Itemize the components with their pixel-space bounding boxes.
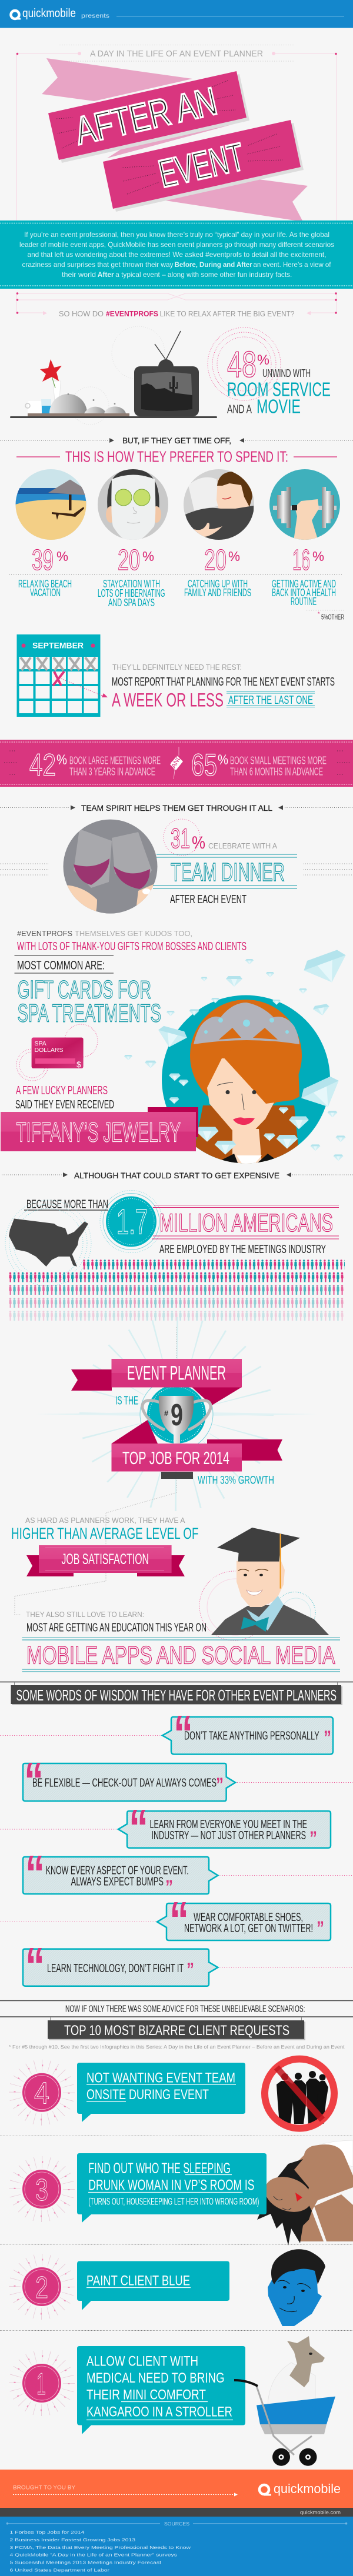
icon: flower vase	[40, 359, 62, 401]
speech bubble	[77, 2153, 267, 2223]
pictogram: rows of people	[8, 1259, 345, 1321]
speech bubble: KANGAROO IN A STROLLER	[86, 2404, 232, 2420]
text block: mobile apps: THEY ALSO STILL LOVE TO LEARN:	[26, 1611, 144, 1619]
intro text: If you’re an event professional, then you know there’s truly no “typical” day in your life. As the global	[24, 230, 329, 239]
icon: water glass	[41, 399, 51, 413]
label: AND SPA DAYS	[108, 597, 155, 609]
icon: calendar: SEPTEMBER	[32, 641, 84, 650]
stat: 48 percent: MOVIE	[257, 395, 301, 417]
footer: url strip: quickmobile.com	[300, 2510, 341, 2515]
banner: event planner: EVENT PLANNER	[127, 1362, 226, 1384]
illustration: graduate	[199, 1528, 329, 1641]
source list: 1 Forbes Top Jobs for 2014	[9, 2530, 85, 2535]
icon: cloches	[49, 394, 126, 413]
footnote: other: *	[318, 611, 320, 617]
icon: usa map	[5, 1200, 91, 1286]
panel: family and friends: %	[228, 549, 240, 564]
label: is the: IS THE	[115, 1395, 138, 1408]
speech bubble: PAINT CLIENT BLUE	[86, 2273, 190, 2288]
footnote: other	[318, 611, 344, 621]
banner: job satisfaction: JOB SATISFACTION	[61, 1551, 149, 1568]
speech bubble: ALLOW CLIENT WITH	[86, 2353, 198, 2370]
label: RELAXING BEACH	[18, 578, 72, 590]
illustration: kangaroo in stroller	[234, 2336, 335, 2466]
speech bubble: FIND OUT WHO THE SLEEPING	[88, 2160, 231, 2177]
stat 39: 39	[32, 544, 54, 576]
banner back folds	[71, 1369, 282, 1461]
icon: dumbbell	[269, 469, 340, 541]
icon: gift card	[16, 1024, 98, 1081]
footer: sources	[0, 2517, 353, 2576]
stat 16: 16	[292, 544, 310, 576]
ribbon: after an: AFTER AN	[71, 79, 221, 153]
quote: learn technology	[23, 1937, 353, 1995]
request 4	[15, 2059, 334, 2129]
arrow: calendar to text	[59, 678, 108, 697]
icon: television	[134, 331, 199, 416]
speech bubble	[77, 2063, 245, 2122]
band: booking stats: %	[56, 752, 67, 768]
and connector	[170, 747, 183, 779]
speech bubble: ONSITE DURING EVENT	[86, 2087, 209, 2103]
icon: coffee cup	[25, 401, 42, 413]
quote: know every aspect: KNOW EVERY ASPECT OF YOUR EVENT.	[46, 1864, 189, 1877]
number badge 2	[15, 2260, 69, 2314]
icon: diamonds	[124, 948, 353, 1161]
stat: 48 percent: AND A	[227, 403, 252, 416]
quote: be flexible: ”	[216, 1774, 224, 1795]
footer: brought to you by	[0, 2470, 353, 2508]
panel: staycation: %	[142, 549, 154, 564]
stat: 1.7 million americans	[5, 1190, 339, 1286]
icon: wine glasses	[62, 819, 159, 917]
panel: beach vacation: %	[56, 549, 68, 564]
text block: job satisfaction: HIGHER THAN AVERAGE LEVEL OF	[11, 1525, 199, 1542]
quote: don't take anything personally: “	[174, 1705, 193, 1763]
icon: no staff sign	[265, 2059, 334, 2129]
intro panel	[0, 220, 353, 289]
label	[184, 578, 251, 599]
badge: 1.7	[100, 1190, 162, 1252]
divider: team spirit: TEAM SPIRIT HELPS THEM GET THROUGH IT ALL	[81, 804, 272, 813]
intro text	[19, 230, 334, 279]
stat 65: 65	[191, 748, 217, 783]
icon: beach	[15, 469, 86, 541]
number badge 1	[15, 2356, 69, 2410]
icon: gift card: SPA	[34, 1040, 46, 1047]
stat: 48 percent	[208, 328, 331, 417]
text block: planning starts: THEY’LL DEFINITELY NEED THE REST:	[112, 663, 242, 671]
text block: gifts: GIFT CARDS FOR	[18, 976, 151, 1004]
speech bubble	[77, 2261, 229, 2310]
stat: team dinner	[0, 819, 353, 906]
stat: 48 percent: UNWIND WITH	[262, 367, 311, 379]
text block: planning starts: AFTER THE LAST ONE	[228, 694, 313, 707]
logo wordmark: quickmobile	[22, 7, 76, 20]
intro text: craziness and surprises that get thrown their way	[22, 260, 173, 269]
stat: 48 percent: %	[257, 352, 269, 368]
icon: calendar	[16, 634, 100, 717]
label: ROUTINE	[291, 596, 317, 607]
illustration: woman with tiara and diamonds	[124, 948, 353, 1164]
quote: don't take anything personally	[0, 1705, 333, 1763]
quote: learn technology: “	[25, 1937, 45, 1995]
icon: trophy: #	[164, 1409, 169, 1418]
request 2	[15, 2249, 325, 2326]
stat 20: 20	[118, 544, 140, 576]
speech bubble	[77, 2346, 245, 2434]
request 3	[15, 2140, 353, 2246]
footer: url strip	[0, 2508, 353, 2517]
text block: gifts: MOST COMMON ARE:	[17, 958, 105, 973]
icon: blue face	[268, 2249, 325, 2326]
source list: 5 Successful Meetings 2013 Meetings Industry Forecast	[9, 2560, 162, 2565]
stat: team dinner: TEAM DINNER	[171, 858, 285, 887]
panel: getting active	[269, 469, 340, 607]
quote: don't take anything personally: ”	[324, 1727, 331, 1748]
band: booking stats: %	[218, 752, 228, 768]
stat: 1.7 million americans: BECAUSE MORE THAN	[26, 1198, 108, 1211]
divider: expensive: ALTHOUGH THAT COULD START TO GET EXPENSIVE	[74, 1171, 279, 1180]
number badge 4: 4	[34, 2077, 49, 2111]
illustration: sleeping woman	[257, 2140, 353, 2246]
quote: learn from everyone: “	[129, 1799, 148, 1857]
quote: wear comfortable shoes: ”	[317, 1917, 324, 1939]
footer: sources: SOURCES	[164, 2521, 189, 2527]
text block: job satisfaction: AS HARD AS PLANNERS WORK, THEY HAVE A	[25, 1516, 185, 1525]
icon: trophy	[142, 1396, 211, 1479]
source list	[9, 2530, 191, 2573]
speech bubble: DRUNK WOMAN IN VP’S ROOM IS	[88, 2177, 254, 2193]
text block: gifts: #EVENTPROFS	[17, 930, 72, 938]
presents label: presents	[81, 13, 109, 19]
divider: expensive	[2, 1171, 353, 1180]
number badge 4	[15, 2066, 69, 2120]
quote: be flexible: “	[24, 1752, 44, 1810]
request 1	[15, 2336, 335, 2466]
question text: SO HOW DO	[59, 309, 104, 318]
ribbon: event: EVENT	[155, 135, 248, 196]
illustration: room service tray and tv	[10, 326, 217, 425]
text block: planning starts: A WEEK OR LESS	[112, 689, 224, 710]
quote: learn from everyone: ”	[309, 1827, 317, 1849]
question text: LIKE TO RELAX AFTER THE BIG EVENT?	[160, 309, 294, 318]
number badge 1: 1	[36, 2367, 46, 2401]
number badge 2: 2	[35, 2271, 48, 2305]
divider: time off	[0, 436, 353, 445]
source list: 2 Business Insider Fastest Growing Jobs 2013	[9, 2537, 135, 2542]
quote: know every aspect: ”	[165, 1876, 173, 1897]
intro text: an event. Here’s a view of	[253, 260, 331, 269]
band: booking stats: THAN 3 YEARS IN ADVANCE	[69, 766, 155, 777]
label: VACATION	[30, 587, 61, 599]
and connector: AND	[170, 754, 183, 769]
question text	[59, 309, 294, 318]
text block: gifts: THEMSELVES GET KUDOS TOO,	[75, 930, 192, 938]
stat 42: 42	[29, 748, 56, 783]
stat: 48 percent: 48	[227, 345, 257, 385]
text block: gifts: SPA TREATMENTS	[18, 1000, 161, 1028]
kicker heading: A DAY IN THE LIFE OF AN EVENT PLANNER	[90, 49, 263, 59]
text block: tiffany's jewelry	[1, 1084, 198, 1151]
source list: 3 PCMA, The Data that Every Meeting Professional Needs to Know	[9, 2545, 191, 2550]
text block: gifts	[14, 930, 247, 1028]
quote: learn technology: LEARN TECHNOLOGY, DON’T FIGHT IT	[47, 1962, 184, 1975]
label	[98, 578, 165, 609]
text block: tiffany's jewelry: TIFFANY’S JEWELRY	[16, 1117, 181, 1148]
label: FAMILY AND FRIENDS	[184, 587, 251, 599]
label	[18, 578, 72, 599]
banner: job satisfaction	[26, 1545, 185, 1576]
label	[272, 578, 336, 607]
icon: quickmobile logo	[11, 11, 21, 19]
panel: family and friends	[184, 469, 254, 599]
panel: staycation	[98, 469, 168, 609]
quote: learn technology: ”	[187, 1959, 194, 1980]
icon: gift card: DOLLARS	[34, 1047, 64, 1054]
quote: be flexible	[23, 1752, 353, 1810]
stat: team dinner: AFTER EACH EVENT	[170, 893, 247, 906]
source list: 6 United States Department of Labor	[9, 2567, 110, 2573]
trophy section	[15, 1327, 318, 1615]
number badge 3	[15, 2162, 69, 2216]
panel: beach vacation	[15, 469, 86, 599]
logo wordmark: quickmobile	[274, 2481, 341, 2496]
quote: wear comfortable shoes	[0, 1891, 331, 1949]
quote: wear comfortable shoes: “	[169, 1891, 189, 1949]
intro text: Before, During and After	[175, 260, 252, 269]
intro text: leader of mobile event apps, QuickMobile has seen event planners go through many different scenarios	[19, 240, 334, 249]
stat: team dinner: %	[192, 833, 205, 853]
icon: gift card: $	[76, 1060, 81, 1069]
quote: know every aspect: “	[25, 1845, 45, 1903]
header bar	[0, 0, 353, 28]
label: growth: WITH 33% GROWTH	[198, 1475, 274, 1486]
number badge 3: 3	[35, 2173, 48, 2207]
icon: trophy: 9	[171, 1398, 183, 1432]
stat: team dinner: 31	[171, 823, 190, 854]
text block: mobile apps: MOST ARE GETTING AN EDUCATION THIS YEAR ON	[26, 1622, 207, 1635]
footnote: * For #5 through #10, See the first two Infographics in this Series: A Day in the Life of an Event Planner – Before an Event and During an Event	[9, 2044, 345, 2050]
text block: tiffany's jewelry: A FEW LUCKY PLANNERS	[16, 1084, 108, 1097]
intro text: After	[98, 270, 114, 279]
banner: event planner	[112, 1359, 242, 1388]
band: booking stats	[0, 740, 353, 787]
panel: getting active: %	[312, 549, 324, 564]
banner: top job	[112, 1444, 242, 1471]
label: STAYCATION WITH	[103, 578, 160, 590]
text block: planning starts	[112, 663, 335, 710]
label: LOTS OF HIBERNATING	[98, 587, 165, 599]
heading: bizarre client requests	[0, 2000, 353, 2050]
intro text: and that left us wondering about the extremes! We asked #eventprofs to detail all the excitement,	[27, 250, 326, 259]
text block: job satisfaction	[11, 1516, 199, 1576]
ribbon: event	[103, 120, 301, 209]
speech bubble: NOT WANTING EVENT TEAM	[86, 2070, 235, 2086]
text block: tiffany's jewelry: SAID THEY EVEN RECEIVED	[15, 1098, 114, 1111]
divider: team spirit	[0, 804, 353, 813]
speech bubble: MEDICAL NEED TO BRING	[86, 2370, 225, 2386]
section question	[16, 292, 337, 318]
stat 20: 20	[204, 544, 227, 576]
ribbon: back tails	[42, 58, 308, 222]
text block: mobile apps	[22, 1611, 340, 1672]
icon: quickmobile logo	[259, 2485, 271, 2495]
quote: know every aspect	[23, 1845, 353, 1903]
quote: know every aspect: ALWAYS EXPECT BUMPS	[71, 1876, 164, 1889]
stat: team dinner: CELEBRATE WITH A	[208, 841, 277, 850]
band: booking stats: BOOK LARGE MEETINGS MORE	[69, 755, 161, 767]
source list: 4 QuickMobile “A Day in the Life of an Event Planner” surveys	[9, 2552, 177, 2558]
heading: bizarre client requests: TOP 10 MOST BIZARRE CLIENT REQUESTS	[64, 2023, 289, 2039]
footer: brought to you by: BROUGHT TO YOU BY	[13, 2485, 75, 2491]
speech bubble: THEIR MINI COMFORT	[86, 2387, 206, 2403]
quote: be flexible: BE FLEXIBLE — CHECK-OUT DAY ALWAYS COMES	[32, 1776, 217, 1789]
icon: face mask	[98, 469, 168, 542]
divider: time off: BUT, IF THEY GET TIME OFF,	[122, 436, 231, 445]
intro text: their world	[62, 270, 96, 279]
icon: hug	[184, 469, 254, 544]
banner: top job: TOP JOB FOR 2014	[122, 1448, 229, 1468]
intro text: a typical event – along with some other fun industry facts.	[115, 270, 292, 279]
badge: 1.7: 1.7	[116, 1202, 148, 1242]
quote: learn from everyone	[0, 1799, 331, 1857]
label: CATCHING UP WITH	[188, 578, 248, 590]
title block: after an event	[16, 45, 337, 222]
question text: #EVENTPROFS	[106, 309, 158, 318]
